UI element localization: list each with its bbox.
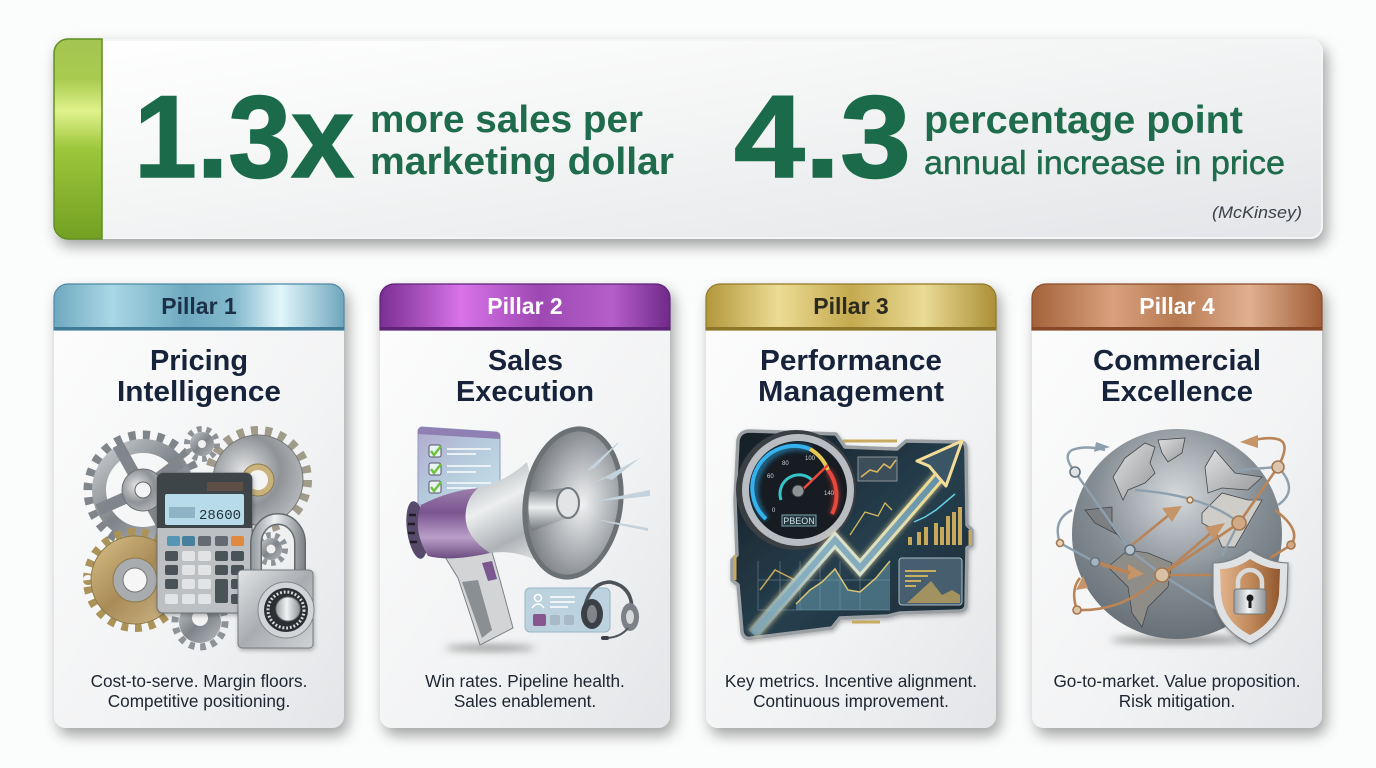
mid trend line [850,503,892,535]
speedometer: 0 [772,508,776,514]
source: (McKinsey) [1212,203,1302,222]
header: pillar 1 [54,284,344,330]
calculator [157,473,252,613]
heading [758,345,945,408]
checklist panel [418,427,500,505]
panel: pillar 3 [706,284,996,728]
gear small right [257,535,285,563]
handle [445,552,513,645]
sound lines [588,443,650,531]
dashboard frame [732,431,972,638]
megaphone bell [513,420,633,586]
description: Key metrics. Incentive alignment. [725,671,977,691]
steel route arcs [1058,448,1289,610]
heading: Execution [456,376,594,408]
headset [581,582,639,640]
description: Cost-to-serve. Margin floors. [91,671,307,691]
header: pillar 4 [1032,284,1322,330]
panel: pillar 2 [380,284,670,728]
padlock [238,519,314,648]
stat: 4.3: 4.3 [734,71,911,202]
green accent bar [54,39,102,239]
megaphone cone [466,462,553,570]
growth arrow [753,441,962,634]
description: Continuous improvement. [753,691,949,711]
steel arrow [1094,442,1110,452]
stat label: sales: more sales per [370,99,643,141]
stat: 1.3x: 1.3x [134,71,354,202]
speedometer: 100 [805,456,816,462]
icon: megaphone with checklist and headset [403,420,650,650]
header: pillar 3 [706,284,996,330]
description: Win rates. Pipeline health. [425,671,625,691]
heading: Management [758,376,945,408]
gold trims [735,441,970,622]
heading: Pricing [150,345,248,377]
bar chart [908,494,962,545]
gear bottom-left [88,533,182,627]
gear top-right [209,431,307,529]
ground shadow [445,646,535,650]
icon: performance dashboard [732,430,972,638]
header: pillar 4: Pillar 4 [1139,293,1215,319]
description: Competitive positioning. [108,691,290,711]
megaphone rear [403,500,431,560]
speedometer [736,430,856,550]
heading [1093,345,1261,408]
megaphone body band [418,488,490,558]
continents [1085,438,1262,627]
stat label: marketing: marketing dollar [370,141,674,183]
speedometer: PBEON [783,516,815,526]
stat label: percentage: percentage point [924,99,1243,142]
small contact panel [525,588,610,632]
speedometer: 60 [767,474,774,480]
heading: Intelligence [117,376,281,408]
globe shadow [1110,637,1250,643]
heading [456,345,594,408]
speedometer: 140 [824,491,835,497]
stat banner [54,39,1322,239]
heading [117,345,281,408]
stat label: annual increase: annual increase in price [924,144,1285,181]
calculator: 28600 [199,508,241,524]
header: pillar 2: Pillar 2 [487,293,563,319]
header: pillar 1: Pillar 1 [161,293,237,319]
icon: globe with arrows and shield [1056,429,1295,644]
gear bottom-centre [175,597,225,647]
heading: Excellence [1101,376,1253,408]
description: Risk mitigation. [1119,691,1235,711]
globe [1072,429,1282,639]
gear small top [187,429,217,459]
heading: Sales [488,345,563,377]
icon: gears, calculator and padlock [88,429,314,648]
heading: Commercial [1093,345,1261,377]
description: Go-to-market. Value proposition. [1053,671,1301,691]
arrowheads [1076,435,1258,590]
header: pillar 2 [380,284,670,330]
small top chart [858,457,897,481]
padlock in shield [1234,570,1266,614]
shield [1213,550,1288,644]
copper route arcs [1074,438,1294,610]
speedometer: 80 [782,461,789,467]
line chart [758,561,890,610]
header: pillar 3: Pillar 3 [813,293,889,319]
overlay window [899,558,962,605]
panel: pillar 1 [54,284,344,728]
panel: pillar 4 [1032,284,1322,728]
route nodes [1056,461,1295,614]
heading: Performance [760,345,942,377]
gear top-left [89,436,197,544]
description: Sales enablement. [454,691,596,711]
